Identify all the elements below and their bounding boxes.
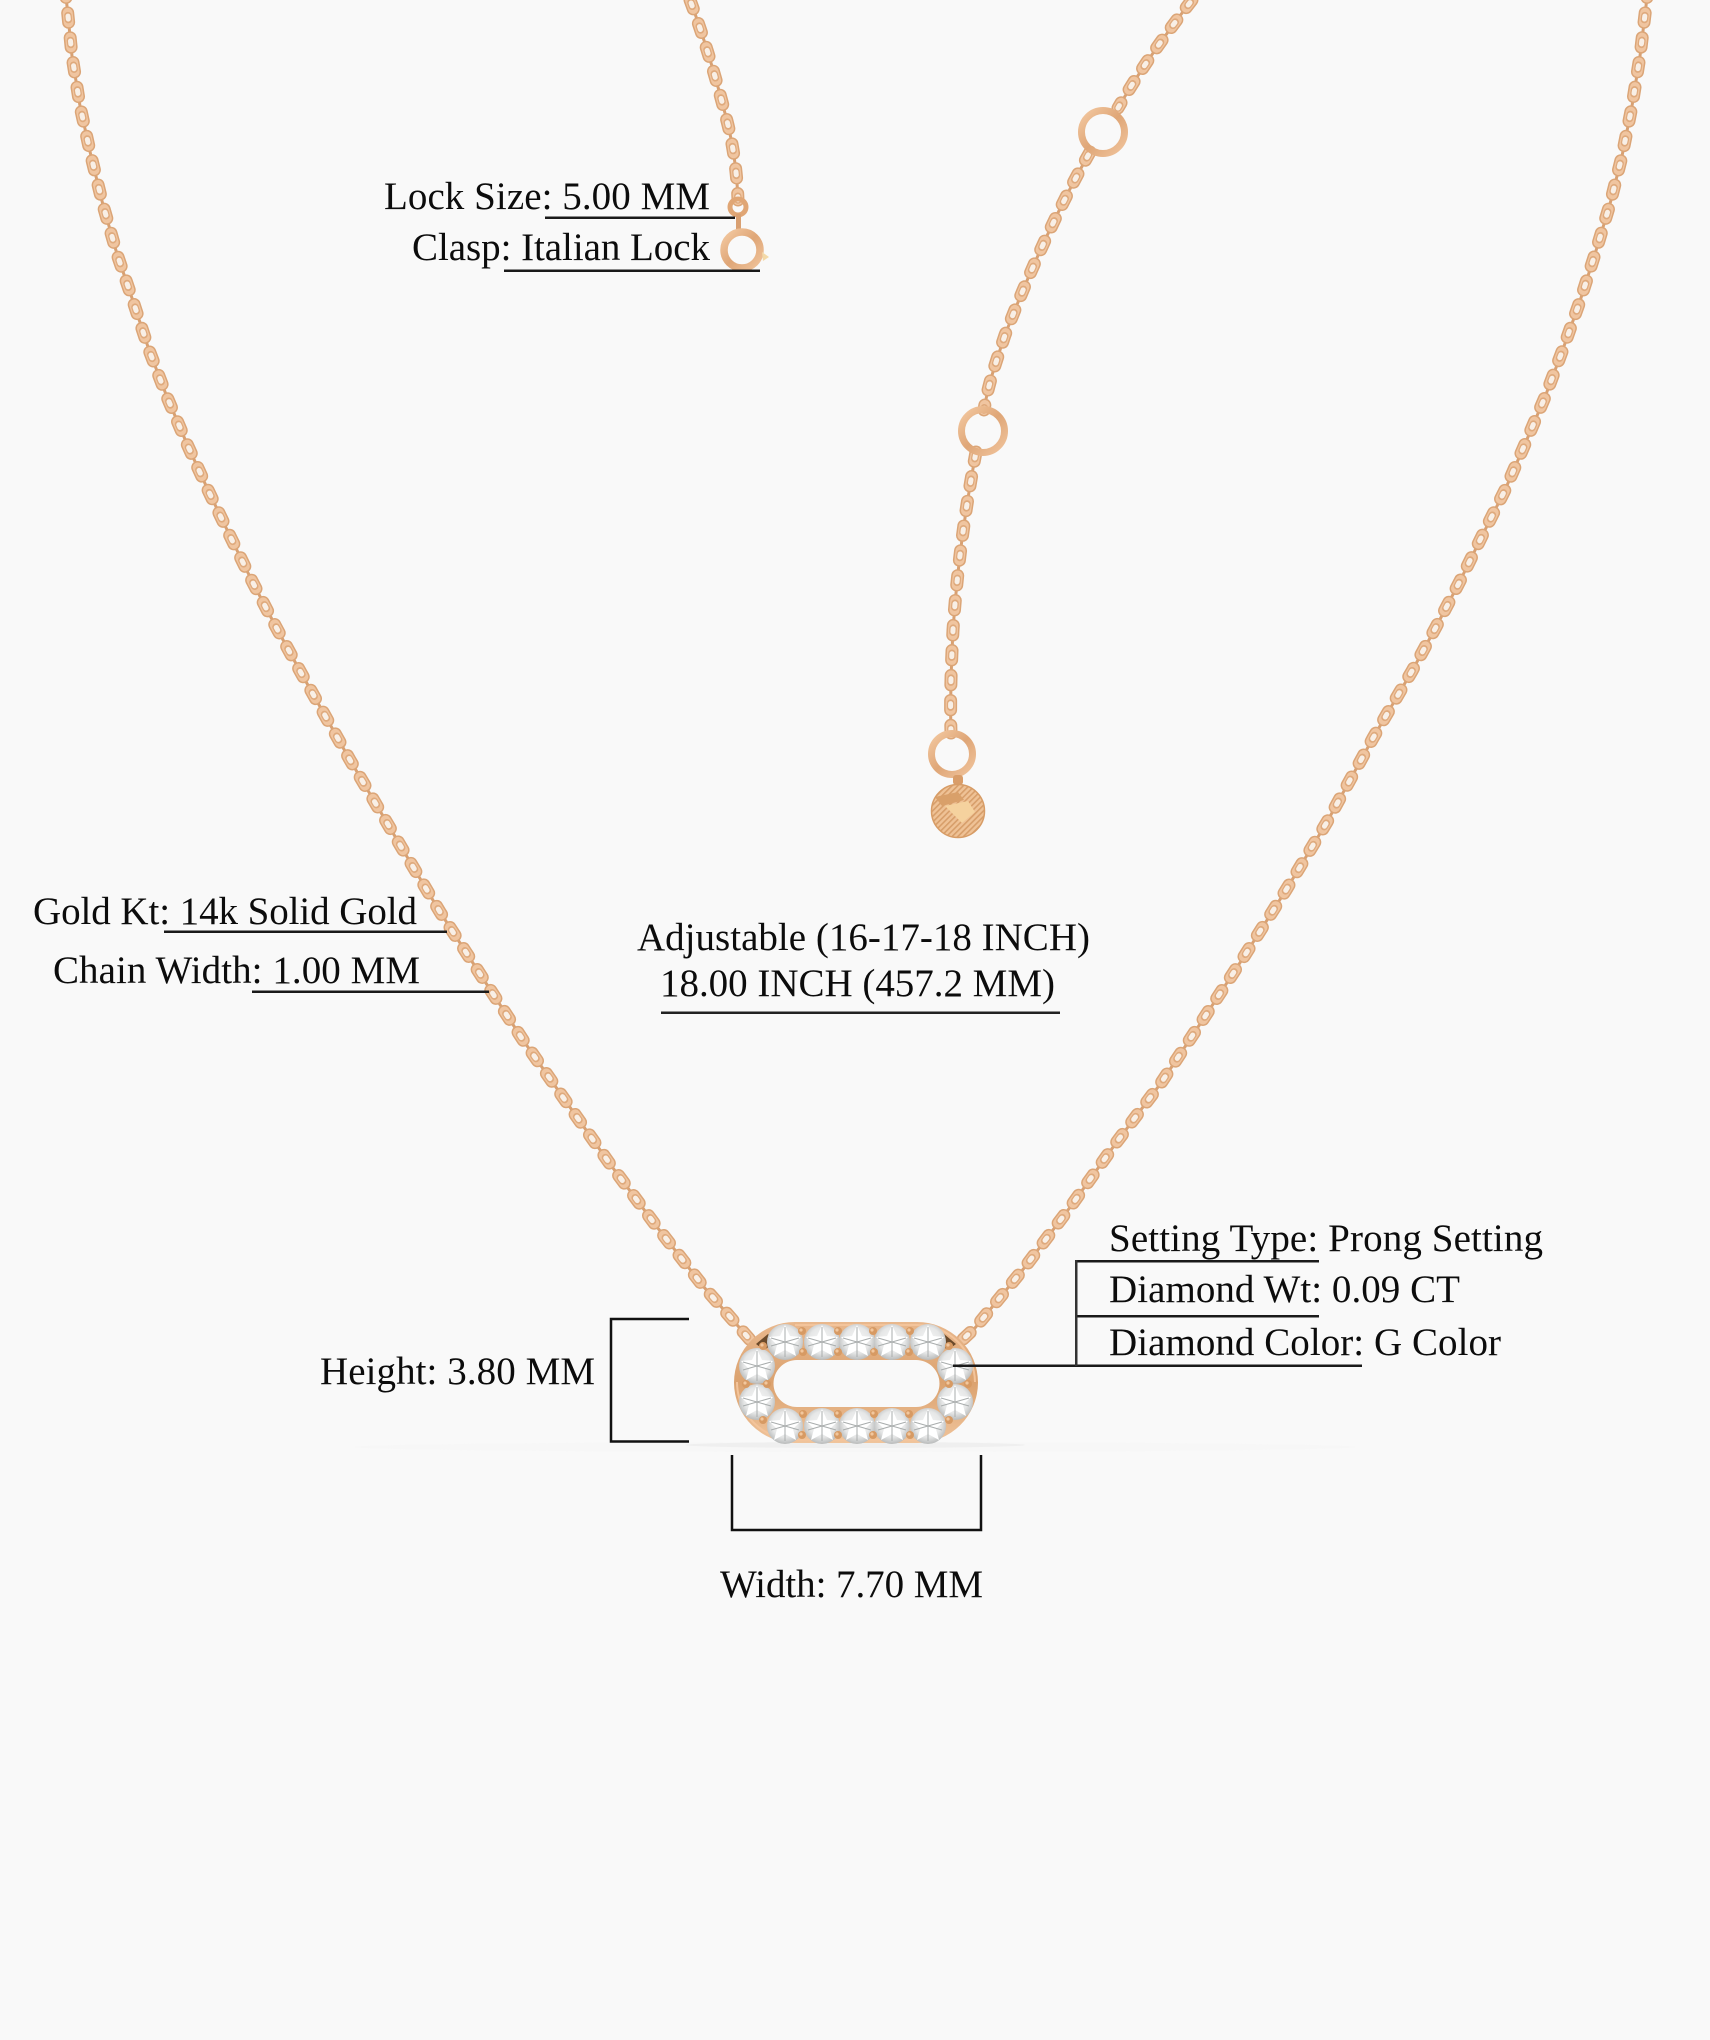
icon: textured charm <box>931 775 985 838</box>
pendant corner shadows <box>756 1334 956 1350</box>
callout: height bracket: Height: 3.80 MM <box>320 1350 595 1393</box>
icon: clasp ring <box>724 214 769 268</box>
callout: adjustable length: 18.00 INCH (457.2 MM) <box>660 962 1055 1005</box>
callout: lock size: Lock Size: 5.00 MM <box>384 175 710 218</box>
extender ring two <box>962 410 1004 452</box>
callout: adjustable length: Adjustable (16-17-18 INCH) <box>637 916 1090 959</box>
main chain: left strand <box>65 0 752 1342</box>
callout: setting and diamond details: Diamond Color: G Color <box>1109 1321 1501 1364</box>
extender ring one <box>1082 110 1124 154</box>
prongs <box>742 1327 972 1439</box>
callout: clasp: Clasp: Italian Lock <box>412 226 710 269</box>
callout: height bracket <box>320 1319 689 1442</box>
pendant: pave oval <box>734 1322 978 1444</box>
pendant rim highlights <box>737 1325 975 1440</box>
callout: setting and diamond details <box>953 1217 1543 1367</box>
pendant metal frame <box>734 1322 978 1443</box>
floor shadow <box>355 1442 1355 1452</box>
callout: setting and diamond details: Diamond Wt: 0.09 CT <box>1109 1268 1460 1311</box>
callout: width bracket <box>720 1455 983 1606</box>
clasp chain <box>690 0 738 200</box>
diamonds <box>739 1324 973 1444</box>
callout: chain width: Chain Width: 1.00 MM <box>53 949 420 992</box>
callout: width bracket: Width: 7.70 MM <box>720 1563 983 1606</box>
extender chain <box>951 0 1192 733</box>
callout: setting and diamond details: Setting Type: Prong Setting <box>1109 1217 1543 1260</box>
main chain: right strand <box>960 0 1648 1342</box>
callout: adjustable length <box>637 916 1090 1014</box>
extender ring three <box>932 734 972 774</box>
callout: gold karat: Gold Kt: 14k Solid Gold <box>33 890 418 933</box>
small clasp jump ring <box>730 199 746 215</box>
